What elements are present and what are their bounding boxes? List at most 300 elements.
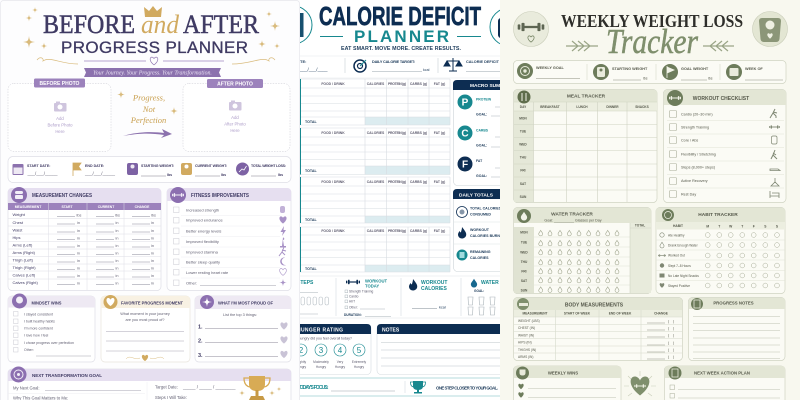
table: meal log 2: CARBS (g) xyxy=(410,131,427,135)
panel: hunger rating: Hungry xyxy=(335,365,346,369)
panel: mindset wins: I chose progress over perfection xyxy=(24,341,74,345)
panel: measurement changes: Arms (Left) xyxy=(12,242,33,248)
panel: measurement changes: in xyxy=(77,259,80,263)
panel: habit tracker: Ate Healthy xyxy=(668,234,685,238)
photo box: before xyxy=(8,78,111,152)
workout today: Other: xyxy=(349,306,358,310)
panel: mindset wins: I stayed consistent xyxy=(24,312,53,316)
panel: daily totals xyxy=(453,189,514,272)
panel: habit tracker: No Late Night Snacks xyxy=(668,274,699,278)
icons: habit glyphs xyxy=(658,233,666,288)
panel: measurement changes: MEASUREMENT CHANGES xyxy=(32,193,93,199)
stats row: CURRENT WEIGHT: xyxy=(195,164,227,168)
panel: meal tracker: SAT xyxy=(520,182,526,186)
panel: next transformation goal: _____ / _____ / ________ xyxy=(182,384,236,390)
stats row xyxy=(8,156,291,182)
ornament: flourish divider xyxy=(37,57,275,65)
panel: measurement changes: in xyxy=(77,266,80,270)
panel: mindset wins: Other: xyxy=(24,348,34,352)
panel: body measurements: MEASUREMENT xyxy=(523,312,548,316)
photo box: before: Add xyxy=(56,116,64,121)
photo box: after: AFTER PHOTO xyxy=(217,82,253,88)
badge: left circle icon xyxy=(274,6,312,44)
panel: measurement changes: in xyxy=(151,236,154,240)
icon: star badge xyxy=(200,295,214,309)
panel: water tracker: TUE xyxy=(521,240,527,244)
panel: workout checklist xyxy=(664,90,786,202)
panel: hunger rating: 3 xyxy=(319,346,324,355)
table: meal log 1: FOOD / DRINK xyxy=(321,82,345,86)
panel: macro summary: C xyxy=(461,128,469,140)
footer: today's focus: ONE STEP CLOSER TO YOUR GOAL. xyxy=(436,386,498,390)
title: calorie deficit: CALORIE DEFICIT xyxy=(319,1,481,31)
panel: favorite progress moment: are you most proud of? xyxy=(125,318,165,322)
info row: date, calorie target, deficit goal: kcal xyxy=(423,68,430,72)
panel: measurement changes xyxy=(8,187,161,290)
panel: progress notes xyxy=(688,298,785,360)
panel: water tracker: THU xyxy=(521,260,528,264)
panel: hunger rating: Moderately xyxy=(313,360,329,364)
panel: habit tracker: T xyxy=(718,224,720,228)
panel: measurement changes: lbs xyxy=(76,214,81,218)
table: meal log 4: CARBS (g) xyxy=(410,229,427,233)
panel: measurement changes: Thigh (Left) xyxy=(12,258,34,262)
panel: daily totals: CONSUMED xyxy=(470,212,491,216)
icon: trophy xyxy=(516,366,529,380)
workout calories xyxy=(409,279,448,310)
icon: water drop xyxy=(517,209,531,223)
panel: daily totals: WORKOUT xyxy=(470,228,490,232)
panel: water tracker: TOTAL xyxy=(635,224,645,228)
panel: macro summary: CARBS xyxy=(476,128,489,132)
panel: body measurements: ARMS (IN) xyxy=(518,355,533,359)
stats row: lbs xyxy=(221,173,226,177)
panel: meal tracker: MEAL TRACKER xyxy=(567,94,606,100)
panel: habit tracker: W xyxy=(729,224,733,228)
panel: hunger rating: Slightly xyxy=(296,360,307,364)
panel: measurement changes: in xyxy=(77,282,80,286)
badge: right circle icon xyxy=(490,8,528,46)
panel: mindset wins: I'm more confident xyxy=(24,326,53,330)
arrow: before to after xyxy=(123,129,172,138)
panel: measurement changes: lbs xyxy=(115,214,120,218)
panel: habit tracker: T xyxy=(741,224,743,228)
panel: measurement changes: in xyxy=(116,266,118,270)
section: steps, workout, calories, water xyxy=(297,276,519,318)
table: meal log 2: PROTEIN (g) xyxy=(388,131,406,135)
photo box: after xyxy=(183,79,290,152)
panel: next week action plan xyxy=(664,366,785,400)
panel: body measurements: ( ) xyxy=(668,326,674,330)
info row: date, calorie target, deficit goal: CALORIE DEFICIT GOAL: xyxy=(466,60,512,64)
panel: habit tracker: HABIT TRACKER xyxy=(698,212,738,218)
panel: water tracker: MON xyxy=(520,230,528,234)
panel: next transformation goal: NEXT TRANSFORMATION GOAL xyxy=(32,373,102,379)
panel: meal tracker: WED xyxy=(519,142,527,146)
panel: fitness improvements: Better sleep quality xyxy=(186,260,220,264)
panel: body measurements: THIGHS (IN) xyxy=(518,348,536,352)
icon: camera xyxy=(54,102,66,112)
panel: habit tracker: S xyxy=(764,224,767,228)
panel: favorite progress moment: What moment in your journey xyxy=(120,312,170,316)
info row: date, calorie target, deficit goal xyxy=(299,56,512,78)
panel: body measurements: ( ) xyxy=(668,334,674,338)
table: meal log 3: FAT (g) xyxy=(434,180,445,184)
icon: calendar xyxy=(12,164,24,175)
table: meal log 1: PROTEIN (g) xyxy=(388,82,406,86)
panel: macro summary: F xyxy=(462,160,468,170)
panel: macro summary: PROTEIN xyxy=(476,98,492,102)
icon: target xyxy=(10,366,26,382)
table: meal log 2: CALORIES xyxy=(367,131,385,135)
workout today: Strength Training xyxy=(349,290,374,294)
table: meal log 1: CALORIES xyxy=(367,82,385,86)
info row: goals: lbs xyxy=(643,76,648,80)
stats row: ___/___/_____ xyxy=(26,171,58,176)
panel: measurement changes: in xyxy=(77,221,80,225)
panel: measurement changes: Thigh (Right) xyxy=(12,265,36,270)
icon: fork and knife xyxy=(518,90,530,104)
icon: flag xyxy=(73,163,81,176)
icons: activity glyphs xyxy=(769,109,780,198)
panel: macro summary xyxy=(453,80,515,186)
title: before and after: and xyxy=(141,10,180,39)
panel: measurement changes: in xyxy=(77,229,80,233)
table: meal log 2: TOTAL xyxy=(305,169,317,173)
table: meal log 1: FAT (g) xyxy=(434,82,445,86)
panel: habit tracker: HABIT xyxy=(673,224,683,228)
panel: habit tracker: Slept 7–8 Hours xyxy=(668,264,691,268)
panel: body measurements: END OF WEEK xyxy=(609,312,632,316)
panel: hunger rating: Very xyxy=(337,360,344,364)
panel: measurement changes: Chest xyxy=(12,220,24,225)
panel: habit tracker: S xyxy=(776,224,779,228)
icon: dumbbell xyxy=(667,90,683,106)
table: meal log 3: CARBS (g) xyxy=(410,180,427,184)
workout today: Cardio xyxy=(349,294,359,298)
panel: water tracker: SAT xyxy=(521,279,527,283)
icon: heart with dumbbell xyxy=(624,371,656,396)
panel: what I'm most proud of: 1. xyxy=(198,324,203,330)
glasses grid: nine drops per day xyxy=(539,230,619,292)
panel: body measurements: HIPS (IN) xyxy=(518,340,532,344)
panel: measurement changes: in xyxy=(151,282,154,286)
table: meal log 1: CARBS (g) xyxy=(410,82,427,86)
workout calories: kcal xyxy=(439,306,446,310)
stats row: lbs xyxy=(167,173,172,177)
ornament: gold heart xyxy=(126,355,164,361)
measurement entry lines xyxy=(57,216,150,284)
panel: water tracker: Goal: __________ Glasses per Day xyxy=(544,218,602,222)
panel: measurement changes: in xyxy=(151,252,154,256)
icon: crown xyxy=(144,6,162,17)
icon: measuring scale xyxy=(11,187,27,203)
photo box: after: Here xyxy=(230,128,240,133)
panel: next transformation goal: Target Date: xyxy=(155,384,178,390)
icon: dumbbell xyxy=(170,187,186,203)
panel: daily totals: CALORIES xyxy=(470,256,489,260)
panel: measurement changes: in xyxy=(116,282,118,286)
title: progress planner: PROGRESS PLANNER xyxy=(61,38,248,57)
panel: measurement changes: Waist xyxy=(12,228,23,232)
table: meal log 4: FAT (g) xyxy=(434,229,445,233)
panel: meal tracker: SUN xyxy=(520,195,527,199)
callout: progress not perfection: Not xyxy=(142,104,156,114)
panel: mindset wins: MINDSET WINS xyxy=(32,300,62,306)
water intake: WATER INTAKE xyxy=(481,280,519,286)
panel: measurement changes: in xyxy=(77,252,80,256)
panel: measurement changes: in xyxy=(77,274,80,278)
info row: goals: WEEK OF xyxy=(745,67,763,71)
icon: scale xyxy=(127,163,138,175)
panel: favorite progress moment xyxy=(101,295,190,362)
panel: mindset wins: I love how I feel xyxy=(24,334,49,338)
panel: measurement changes: Calves (Left) xyxy=(12,272,36,278)
panel: macro summary: GOAL: xyxy=(476,144,487,148)
panel: meal tracker: THU xyxy=(520,156,527,160)
tagline: EAT SMART. MOVE MORE. CREATE RESULTS. xyxy=(341,46,462,52)
table: meal log 3: PROTEIN (g) xyxy=(388,180,406,184)
panel: workout checklist: Steps (8,000+ steps) xyxy=(681,166,715,170)
workout calories: CALORIES xyxy=(421,286,448,292)
badge: scale xyxy=(752,12,788,46)
icon: tape measure xyxy=(517,298,529,310)
panel: what I'm most proud of: 2. xyxy=(198,338,203,344)
panel: measurement changes: in xyxy=(151,229,154,233)
steps tracker xyxy=(297,280,328,314)
panel: body measurements: WAIST (IN) xyxy=(518,334,534,338)
table: meal log 2: FAT (g) xyxy=(434,131,445,135)
icon: target xyxy=(354,60,366,72)
panel: measurement changes: in xyxy=(116,244,118,248)
panel: body measurements: ( ) xyxy=(668,320,674,324)
panel: workout checklist: Cardio (20–30 min) xyxy=(681,112,713,116)
info row: goals: GOAL WEIGHT xyxy=(681,67,709,71)
panel: hunger rating: Hungry xyxy=(296,365,307,369)
table: meal log 1: TOTAL xyxy=(305,120,317,124)
panel: macro summary: MACRO SUMMARY xyxy=(470,83,515,89)
title: before and after: AFTER xyxy=(183,10,260,39)
panel: what I'm most proud of: 3. xyxy=(198,353,203,359)
panel: what I'm most proud of xyxy=(195,295,291,362)
panel: notes xyxy=(377,324,512,374)
panel: water tracker: WED xyxy=(520,250,528,254)
stats row: lbs xyxy=(278,173,283,177)
ornament: leaves xyxy=(566,41,734,51)
info row: goals: STARTING WEIGHT xyxy=(612,67,648,71)
panel: meal tracker: MON xyxy=(519,116,527,120)
panel: meal tracker: DAY xyxy=(520,105,527,109)
title: before and after xyxy=(43,10,260,39)
panel: daily totals: REMAINING xyxy=(470,250,491,254)
panel: measurement changes: START xyxy=(61,205,73,209)
panel: measurement changes: in xyxy=(116,252,118,256)
panel: measurement changes: in xyxy=(116,259,118,263)
panel: hunger rating: Hungry xyxy=(316,365,327,369)
workout today: HIIT xyxy=(349,300,355,304)
panel: meal tracker: FRI xyxy=(520,168,526,172)
table: meal log 4: CALORIES xyxy=(367,229,385,233)
panel: next week action plan: NEXT WEEK ACTION PLAN xyxy=(694,370,750,376)
workout today: WORKOUT xyxy=(365,278,388,284)
panel: macro summary: GOAL: xyxy=(476,174,487,178)
panel: before and after progress planner xyxy=(0,0,300,400)
panel: hunger rating: 5 xyxy=(357,346,362,355)
steps tracker: STEPS xyxy=(297,280,314,286)
title: planner: PLANNER xyxy=(354,27,449,46)
panel: body measurements: WEIGHT (LBS) xyxy=(518,319,540,323)
table: meal log 3: FOOD / DRINK xyxy=(321,180,345,184)
panel: weekly weight loss tracker xyxy=(500,0,800,400)
photo box: before: BEFORE PHOTO xyxy=(40,81,80,87)
table: meal log 4: PROTEIN (g) xyxy=(388,229,406,233)
callout: progress not perfection: Perfection xyxy=(130,115,166,125)
panel: water tracker: WATER TRACKER xyxy=(551,212,593,218)
badge: dumbbell xyxy=(514,12,548,46)
panel: measurement changes: Hips xyxy=(12,235,21,240)
photo box: before: Before Photo xyxy=(47,122,73,128)
panel: water tracker: SUN xyxy=(521,288,528,292)
panel: calorie deficit planner xyxy=(274,0,528,400)
info row: date, calorie target, deficit goal: TE: xyxy=(300,59,306,64)
panel: habit tracker: Drank Enough Water xyxy=(668,244,699,248)
icons: fitness glyphs xyxy=(279,206,287,286)
panel: measurement changes: CHANGE xyxy=(135,205,150,209)
panel: habit tracker: Stayed Positive xyxy=(668,284,690,288)
panel: measurement changes: in xyxy=(151,221,154,225)
panel: water tracker xyxy=(514,208,651,294)
panel: hunger rating: Extremely xyxy=(352,360,366,364)
panel: workout checklist: Active Recovery xyxy=(681,179,708,183)
habit grid circles xyxy=(705,233,779,288)
table: meal log 2 xyxy=(300,128,450,174)
workout today xyxy=(344,278,391,317)
info row: date, calorie target, deficit goal: ___/___/____ xyxy=(299,67,328,72)
table: meal log 3: TOTAL xyxy=(305,218,317,222)
panel: measurement changes: MEASUREMENT xyxy=(15,205,42,209)
icon: calendar xyxy=(726,64,742,80)
panel: daily totals: DAILY TOTALS xyxy=(459,192,494,198)
table: meal log 2: FOOD / DRINK xyxy=(321,131,345,135)
panel: fitness improvements: Improved flexibility xyxy=(186,239,219,244)
stats row: END DATE: xyxy=(85,164,104,168)
stats row: STARTING WEIGHT: xyxy=(141,164,174,168)
panel: meal tracker: SNACKS xyxy=(635,105,649,109)
panel: fitness improvements xyxy=(167,187,291,290)
table: meal log 4 xyxy=(300,227,450,272)
panel: habit tracker: Worked Out xyxy=(668,254,685,258)
panel: next transformation goal: My Next Goal: xyxy=(13,386,40,390)
panel: fitness improvements: Improved stamina xyxy=(186,250,219,254)
panel: measurement changes: Arms (Right) xyxy=(12,250,36,255)
panel: meal tracker xyxy=(514,90,657,202)
ribbon: tagline xyxy=(84,68,221,77)
panel: measurement changes: in xyxy=(151,244,154,248)
callout: progress not perfection xyxy=(117,90,178,125)
panel: meal tracker: LUNCH xyxy=(576,105,588,109)
panel: measurement changes: in xyxy=(116,229,118,233)
panel: workout checklist: WORKOUT CHECKLIST xyxy=(693,96,749,102)
panel: what I'm most proud of: List the top 3 things: xyxy=(223,313,257,317)
water intake xyxy=(468,279,519,315)
panel: mindset wins xyxy=(8,294,95,362)
panel: body measurements: START OF WEEK xyxy=(564,312,591,316)
panel: measurement changes: Weight xyxy=(12,212,26,217)
panel: fitness improvements: Other: xyxy=(186,280,197,286)
icon: trophy xyxy=(410,381,426,394)
panel: water tracker: FRI xyxy=(521,270,527,274)
workout today: DURATION: xyxy=(344,313,362,317)
panel: body measurements: CHEST (IN) xyxy=(518,326,535,330)
panel: measurement changes: CURRENT xyxy=(98,205,115,209)
title: weekly weight loss: WEEKLY WEIGHT LOSS xyxy=(561,11,743,31)
icon: check badge xyxy=(662,209,674,221)
icon: flag xyxy=(662,64,678,80)
stats row: ___/___/_____ xyxy=(84,171,116,176)
panel: hunger rating: 4 xyxy=(338,346,343,355)
panel: progress notes: PROGRESS NOTES xyxy=(713,300,754,306)
panel: workout checklist: Flexibility / Stretching xyxy=(681,152,716,156)
workout calories: WORKOUT xyxy=(421,280,447,286)
table: meal log 3: CALORIES xyxy=(367,180,385,184)
panel: fitness improvements: Increased strength xyxy=(186,208,219,212)
panel: macro summary: FAT xyxy=(476,159,483,163)
panel: measurement changes: in xyxy=(151,259,154,263)
panel: measurement changes: in xyxy=(116,221,118,225)
panel: next transformation goal xyxy=(8,366,291,400)
panel: macro summary: P xyxy=(462,98,469,108)
icon: mind xyxy=(12,294,27,308)
panel: habit tracker: F xyxy=(753,224,755,228)
title: tracker script: Tracker xyxy=(606,22,698,61)
panel: meal tracker: TUE xyxy=(520,130,526,134)
photo box: after: After Photo xyxy=(224,122,246,126)
panel: hunger rating: 2 xyxy=(299,346,304,355)
panel: habit tracker: M xyxy=(706,224,709,228)
photo box: before: Here xyxy=(55,129,65,134)
info row: goals xyxy=(514,60,786,84)
ornament: sparkles xyxy=(23,7,280,50)
icon: chart badge xyxy=(236,162,249,176)
icon: scales xyxy=(444,58,462,71)
panel: measurement changes: Calves (Right) xyxy=(12,280,39,285)
table: meal log 1 xyxy=(300,79,450,125)
panel: measurement changes: in xyxy=(116,236,118,240)
icon: gold scale xyxy=(181,163,192,175)
panel: hunger rating: HUNGER RATING xyxy=(297,328,343,334)
panel: fitness improvements: Better energy levels xyxy=(186,228,221,234)
panel: body measurements: ( ) xyxy=(668,348,674,352)
panel: macro summary: GOAL: xyxy=(476,112,487,116)
photo box: after: Add xyxy=(231,115,239,120)
panel: measurement changes: lbs xyxy=(151,214,156,218)
info row: goals: WEEKLY GOAL xyxy=(536,66,565,70)
stats row: START DATE: xyxy=(27,164,50,168)
panel: favorite progress moment: FAVORITE PROGRESS MOMENT xyxy=(121,300,183,306)
footer: today's focus xyxy=(298,378,500,396)
panel: body measurements xyxy=(514,298,682,360)
panel: meal tracker: BREAKFAST xyxy=(540,105,560,109)
panel: measurement changes: in xyxy=(151,266,154,270)
icon: checklist xyxy=(668,366,682,380)
table: meal log 4: TOTAL xyxy=(305,267,317,271)
panel: habit tracker xyxy=(656,208,785,294)
panel: body measurements: BODY MEASUREMENTS xyxy=(565,302,624,308)
panel: body measurements: CHANGE xyxy=(654,312,668,316)
icon: heart badge xyxy=(104,295,118,309)
panel: measurement changes: in xyxy=(151,274,154,278)
callout: progress not perfection: Progress, xyxy=(132,92,165,102)
